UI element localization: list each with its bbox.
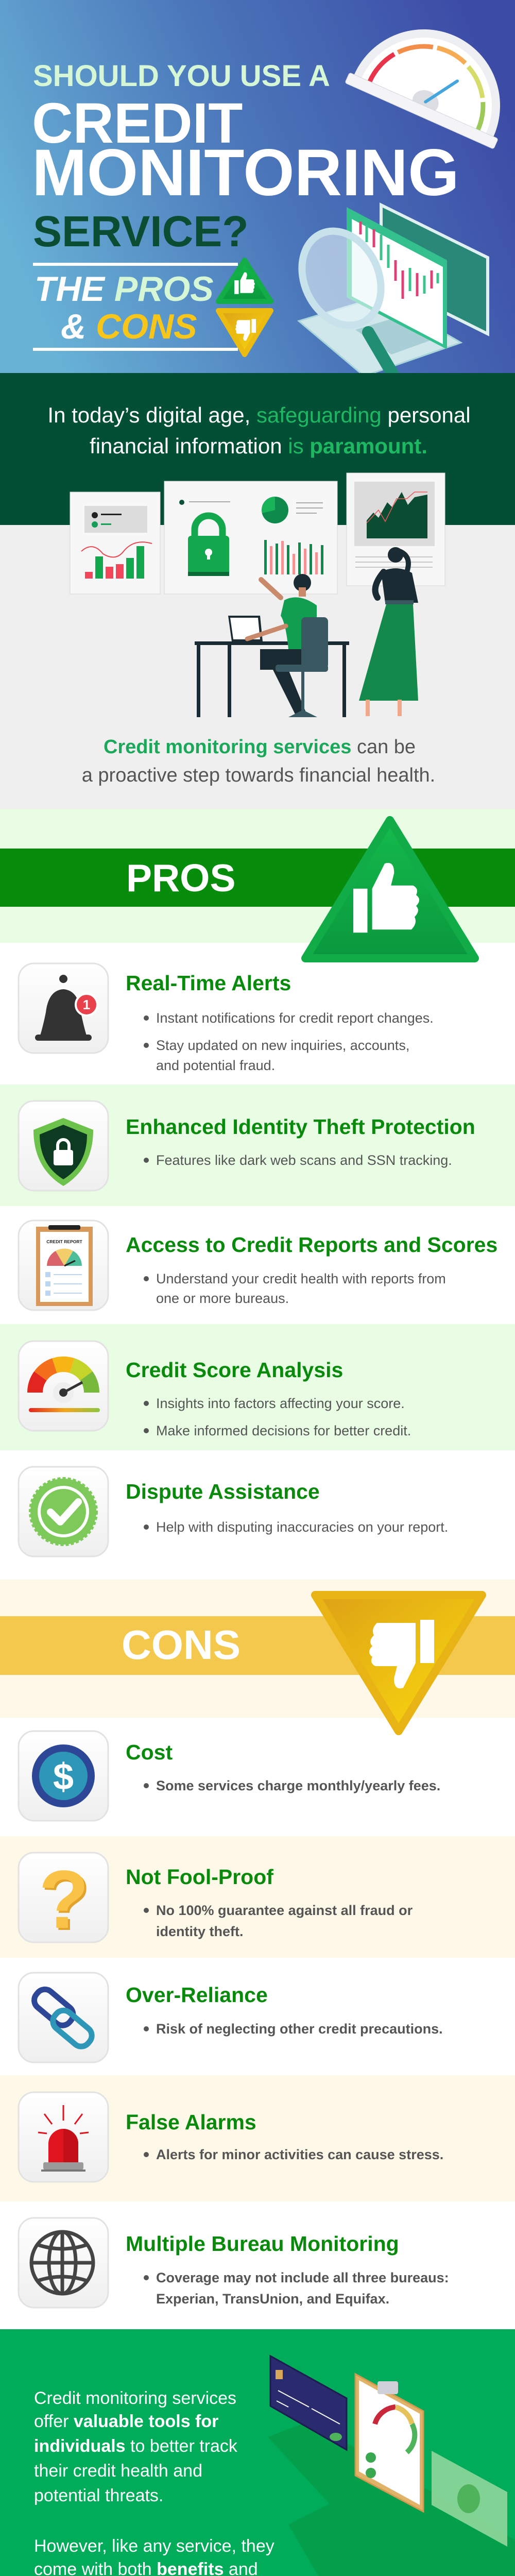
pros item: access to reports: one or more bureaus. <box>156 1291 289 1306</box>
title: CREDIT <box>32 92 243 155</box>
cons item: multiple bureau monitoring: Multiple Bureau Monitoring <box>126 2232 399 2256</box>
pros item: identity theft protection: Enhanced Identity Theft Protection <box>126 1115 475 1139</box>
header background <box>0 0 515 373</box>
intro text: financial information is paramount. <box>90 434 427 458</box>
triangle overlap redraw <box>305 820 475 958</box>
summary text: offer valuable tools for <box>34 2412 218 2431</box>
icon: header cons triangle <box>218 311 271 354</box>
summary text: their credit health and <box>34 2461 202 2481</box>
pros item: access to reports: CREDIT REPORT <box>46 1239 83 1244</box>
cons item: false alarms <box>0 2075 515 2201</box>
cons item: over-reliance <box>0 1958 515 2075</box>
pros item: credit score analysis: Make informed decisions for better credit. <box>156 1423 411 1438</box>
cons item: not fool-proof: identity theft. <box>156 1924 243 1939</box>
cons item: not fool-proof: ? <box>41 1855 91 1947</box>
panel: pros header: PROS <box>126 856 236 900</box>
cons item: multiple bureau monitoring <box>0 2201 515 2329</box>
cons item: cost: $ <box>53 1756 74 1798</box>
title: & CONS <box>61 307 197 346</box>
pros item: dispute assistance <box>0 1450 515 1580</box>
cons item: cost: Cost <box>126 1740 173 1764</box>
pros item: real-time alerts: Instant notifications for credit report changes. <box>156 1010 434 1026</box>
pros item: real-time alerts: and potential fraud. <box>156 1058 275 1073</box>
cons item: false alarms: Alerts for minor activities can cause stress. <box>156 2147 443 2162</box>
cons item: false alarms: False Alarms <box>126 2110 256 2134</box>
summary text: However, like any service, they <box>34 2536 274 2556</box>
panel: cons header <box>0 1580 515 1718</box>
panel: cons header: CONS <box>122 1622 241 1668</box>
pros item: identity theft protection <box>0 1084 515 1206</box>
icon: gauge illustration <box>345 3 515 149</box>
intro text <box>47 403 471 458</box>
cons item: cost: Some services charge monthly/yearly fees. <box>156 1778 440 1793</box>
cons item: not fool-proof: Not Fool-Proof <box>126 1865 273 1889</box>
pros item: identity theft protection: Features like dark web scans and SSN tracking. <box>156 1153 452 1168</box>
summary text: individuals to better track <box>34 2436 238 2456</box>
pros item: credit score analysis: Insights into factors affecting your score. <box>156 1396 405 1411</box>
pros item: credit score analysis: Credit Score Analysis <box>126 1358 343 1382</box>
gray illustration section <box>0 525 515 809</box>
pros item: real-time alerts: 1 <box>83 997 90 1012</box>
panel: summary <box>0 2329 515 2576</box>
intro band <box>0 373 515 526</box>
cons item: multiple bureau monitoring: Experian, TransUnion, and Equifax. <box>156 2291 389 2307</box>
pros item: real-time alerts: Stay updated on new inquiries, accounts, <box>156 1038 409 1053</box>
pros item: access to reports <box>0 1206 515 1324</box>
intro text: In today’s digital age, safeguarding personal <box>47 403 471 427</box>
cons item: over-reliance: Over-Reliance <box>126 1983 268 2007</box>
title <box>32 59 459 351</box>
summary text: potential threats. <box>34 2486 163 2505</box>
title: THE PROS <box>35 269 214 309</box>
cons item: not fool-proof: No 100% guarantee against all fraud or <box>156 1903 413 1918</box>
illustration: card, clipboard, money <box>268 2356 515 2576</box>
summary text <box>34 2388 274 2576</box>
caption text: a proactive step towards financial health. <box>82 765 435 786</box>
title: MONITORING <box>32 136 459 210</box>
pros item: dispute assistance: Dispute Assistance <box>126 1480 320 1503</box>
pros item: access to reports: Understand your credit health with reports from <box>156 1271 446 1286</box>
cons item: not fool-proof: ? <box>39 1853 89 1945</box>
title: SERVICE? <box>33 207 249 256</box>
illustration: dashboards and people <box>70 473 445 717</box>
title: SHOULD YOU USE A <box>33 59 330 93</box>
caption text <box>82 736 435 786</box>
panel: pros header <box>0 809 515 958</box>
caption text: Credit monitoring services can be <box>104 736 416 758</box>
icon: pros thumb <box>353 863 419 933</box>
icon: laptop with magnifier <box>287 205 488 382</box>
pros item: access to reports: Access to Credit Reports and Scores <box>126 1233 497 1257</box>
pros item: real-time alerts <box>0 943 515 1084</box>
cons item: over-reliance: Risk of neglecting other credit precautions. <box>156 2021 443 2037</box>
pros item: dispute assistance: Help with disputing inaccuracies on your report. <box>156 1519 448 1535</box>
icon: cons triangle <box>315 1595 482 1731</box>
cons item: not fool-proof <box>0 1836 515 1958</box>
summary text: Credit monitoring services <box>34 2388 236 2408</box>
cons item: cost <box>0 1718 515 1836</box>
icon: header pros triangle <box>218 260 271 301</box>
cons item: multiple bureau monitoring: Coverage may not include all three bureaus: <box>156 2270 449 2285</box>
pros item: real-time alerts: Real-Time Alerts <box>126 971 291 995</box>
pros item: credit score analysis <box>0 1324 515 1450</box>
